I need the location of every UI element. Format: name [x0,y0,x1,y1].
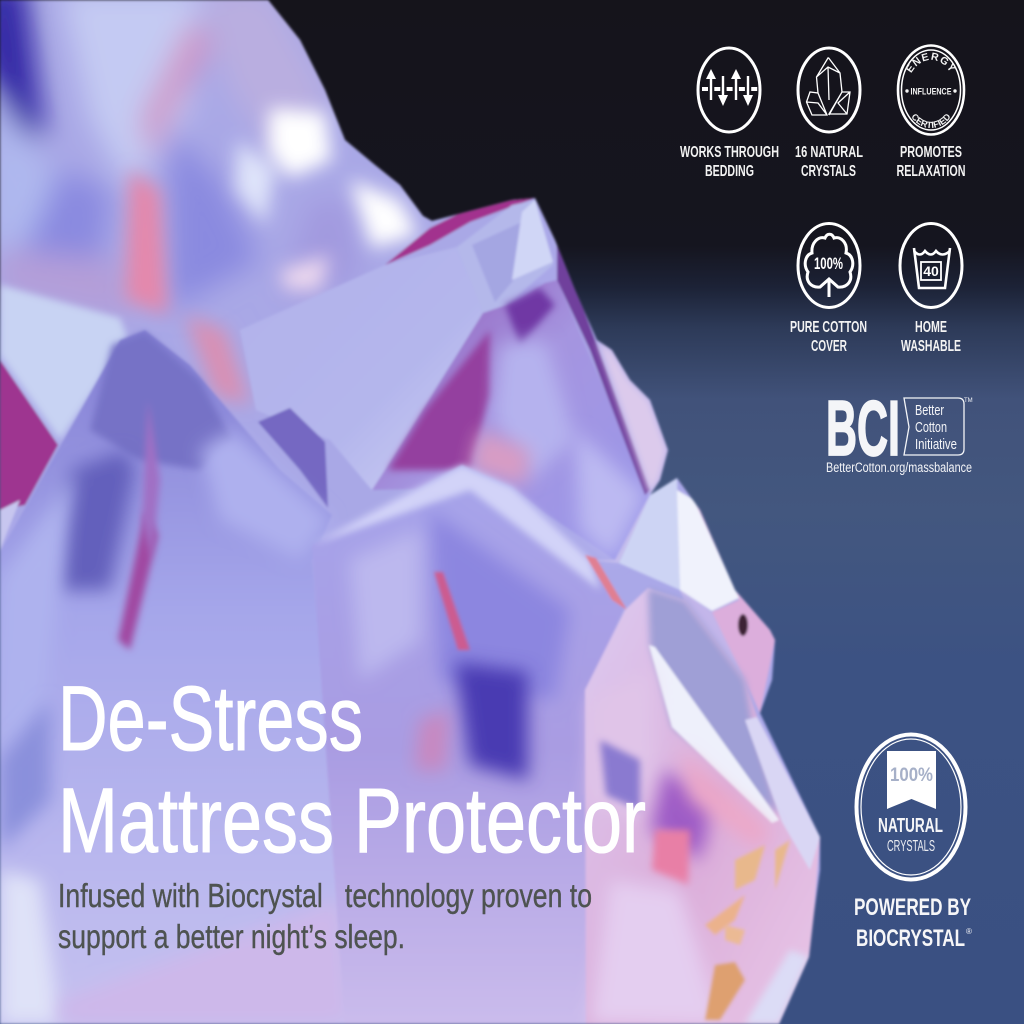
crystal: small bright point [590,478,775,713]
label: promotes relaxation: RELAXATION [896,163,966,180]
crystal: lower centre prism [312,465,627,1024]
label: home washable [901,319,961,355]
label: promotes relaxation [896,144,966,180]
label: pure cotton cover [790,319,867,355]
icon: home washable 40 [900,224,962,308]
icon: pure cotton: 100% [814,254,843,273]
label: works through bedding: WORKS THROUGH [680,144,779,161]
powered by biocrystal: POWERED BY [854,894,971,921]
crystal: lower right pink prism [585,588,820,1024]
label: 16 natural crystals [795,144,863,180]
powered by biocrystal: BIOCRYSTAL [856,925,965,952]
BCI logo: Cotton [915,419,947,436]
label: works through bedding [680,144,779,180]
crystal: main central prism [240,198,668,560]
title: De-Stress [58,668,363,770]
label: 16 natural crystals: CRYSTALS [801,163,856,180]
icon: energy influence certified stamp: INFLUENCE [910,86,952,98]
badge: 100% natural crystals [856,734,966,880]
label: pure cotton cover: PURE COTTON [790,319,867,336]
label: home washable: HOME [915,319,947,336]
badge: 100% natural crystals: NATURAL [878,815,943,837]
subtitle: support a better night’s sleep. [58,918,405,955]
subtitle: Infused with Biocrystal technology proven to [58,877,592,914]
icon: energy influence certified stamp: ENERGY [906,52,956,73]
label: home washable: WASHABLE [901,338,961,355]
powered by biocrystal: ® [966,927,972,936]
icon: works through bedding [698,48,760,132]
label: promotes relaxation: PROMOTES [900,144,962,161]
title [58,668,646,872]
label: works through bedding: BEDDING [705,163,754,180]
icon: energy influence certified stamp: CERTIFIED [912,114,950,128]
icon: home washable 40: 40 [923,263,939,279]
icon: pure cotton [798,224,860,308]
title: Mattress Protector [58,770,646,872]
BCI logo: Better [915,402,944,419]
BCI logo: BCI [826,384,900,472]
subtitle [58,877,592,955]
badge: 100% natural crystals: 100% [890,765,933,786]
crystal: small dark facet between prisms [258,408,328,508]
icon: 16 natural crystals [798,48,860,132]
BCI logo: Initiative [915,436,957,453]
badge: 100% natural crystals: CRYSTALS [887,838,935,855]
crystal: blurred rear cluster [0,0,424,411]
ribbon [887,751,936,809]
crystal: left pale shard [0,285,128,550]
BCI logo: BetterCotton.org/massbalance [826,460,972,475]
powered by biocrystal [854,894,972,952]
BCI logo: TM [964,398,973,404]
label: 16 natural crystals: 16 NATURAL [795,144,863,161]
crystal: lower left prism [0,330,350,1024]
icon: energy influence certified stamp [896,44,966,136]
label: pure cotton cover: COVER [811,338,847,355]
